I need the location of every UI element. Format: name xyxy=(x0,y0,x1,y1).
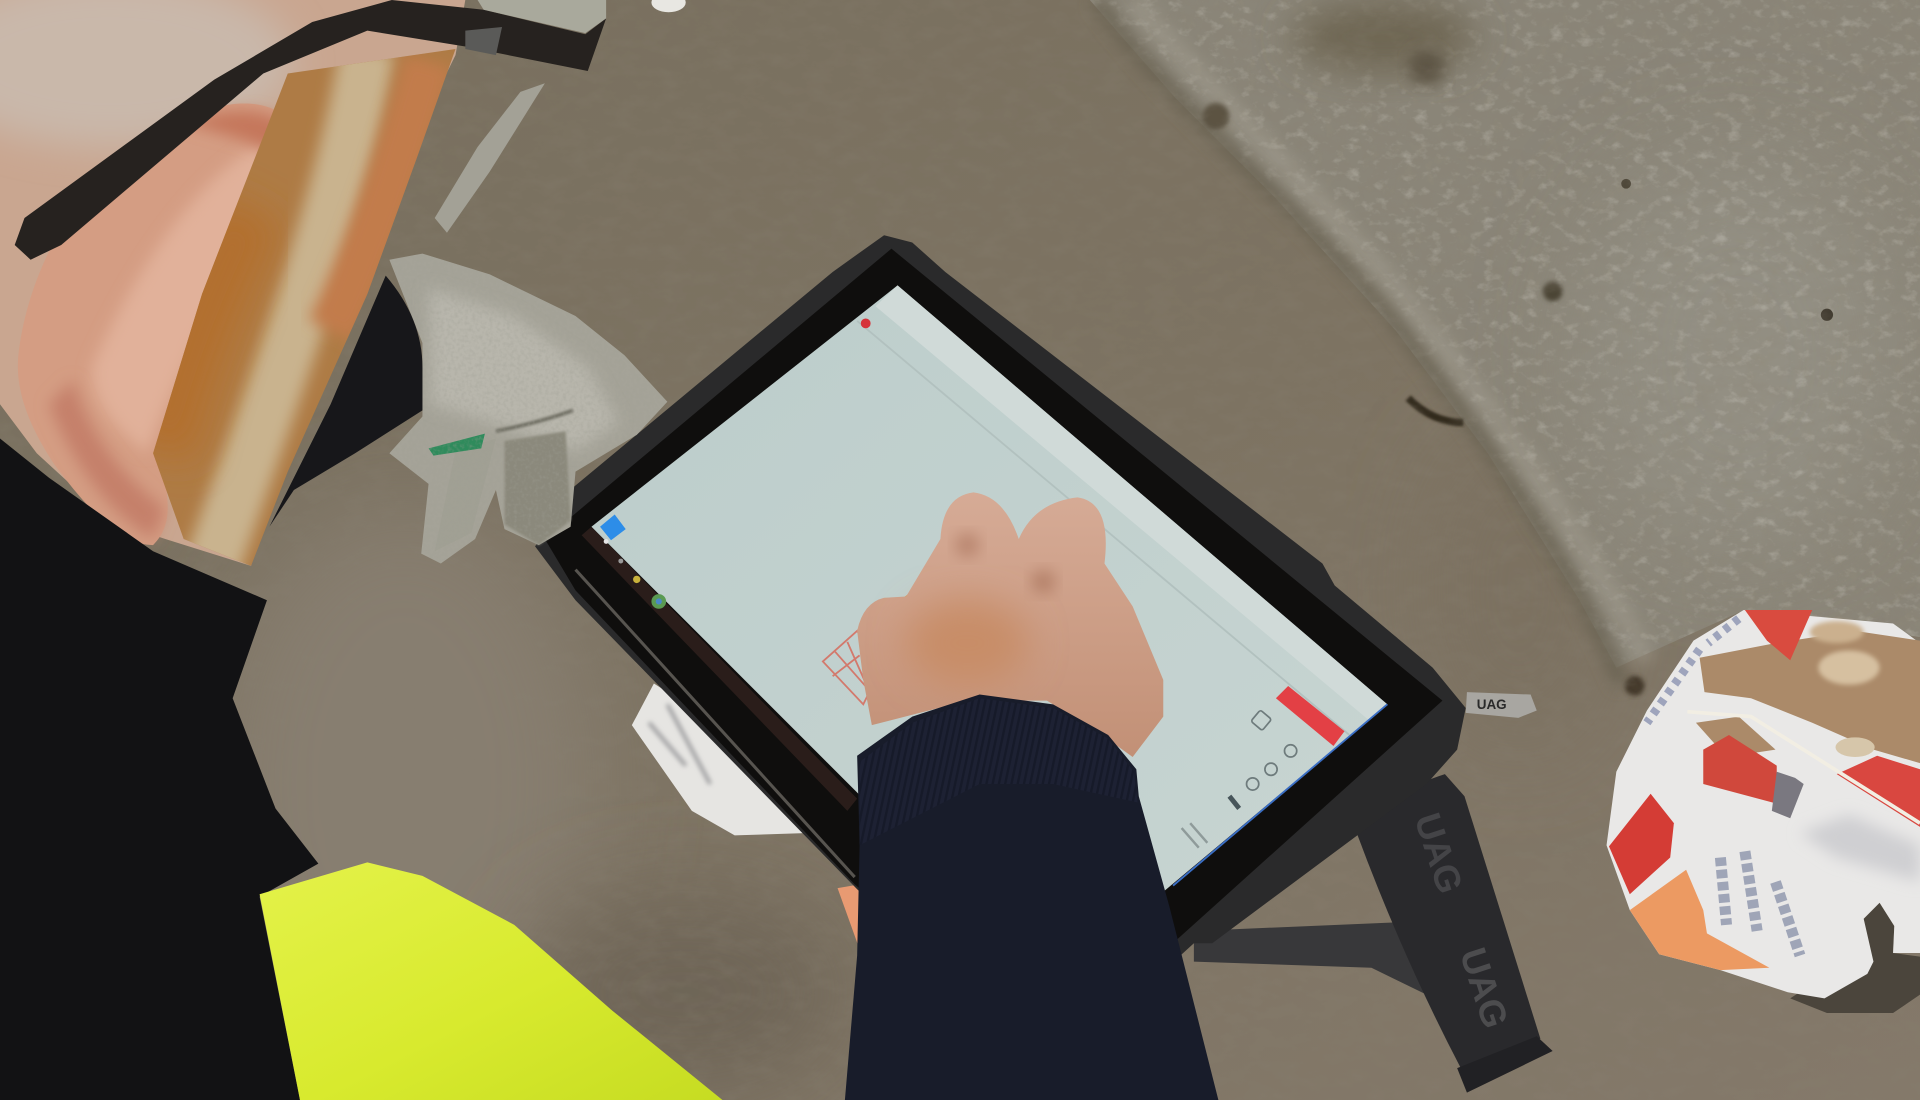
tablet screen xyxy=(582,285,1387,986)
tablet xyxy=(535,235,1466,1072)
left hand in grey glove xyxy=(380,245,673,570)
head: glasses lens reflection xyxy=(435,83,545,233)
worker head xyxy=(0,0,606,588)
head: beard xyxy=(153,49,456,566)
small white fleck at top edge xyxy=(651,0,686,12)
sleeve: ribbed cuff xyxy=(860,698,1138,845)
head: ear xyxy=(18,103,303,545)
bag: white paper body xyxy=(1607,610,1920,998)
right hand pointing at screen xyxy=(857,492,1163,757)
bag: crease xyxy=(1687,712,1920,823)
screen: bottom toolbar icons xyxy=(1182,710,1297,848)
bag: red band right xyxy=(1837,756,1920,827)
screen: red action button xyxy=(1276,686,1344,746)
background: rough lighter concrete at right xyxy=(1090,0,1920,699)
bag: dark hole and debris xyxy=(1790,903,1920,1013)
worker jacket: dark collar and body xyxy=(0,439,318,1100)
tablet strap xyxy=(1194,692,1553,1093)
bag: printed text block xyxy=(1720,851,1800,955)
worker right sleeve xyxy=(845,695,1218,1100)
screen: red record dot xyxy=(861,318,871,328)
head: skin xyxy=(0,0,465,566)
screen: top app bar xyxy=(876,285,1387,720)
strap: woven logo lower: UAG xyxy=(1452,943,1516,1033)
high visibility vest xyxy=(260,862,722,1100)
tablet bezel xyxy=(545,249,1442,1051)
bag: red logo top xyxy=(1745,610,1812,660)
bag: orange panel xyxy=(1630,870,1769,970)
head: safety glasses arm xyxy=(15,0,606,260)
screen: blue app tile xyxy=(600,514,626,540)
bag: red logo centre xyxy=(1703,735,1777,804)
cement bag: crumpled behind tablet xyxy=(632,684,860,949)
tablet edge highlight xyxy=(576,570,855,877)
screen: red floor plan drawing xyxy=(823,582,927,704)
tablet rugged case xyxy=(535,235,1466,1072)
screen: blue edge fringe xyxy=(1173,704,1387,886)
strap: grey tag xyxy=(1466,692,1537,718)
tablet strap: UAG xyxy=(1477,697,1507,712)
strap: woven logo upper: UAG xyxy=(1407,808,1471,898)
worker sleeve: left arm xyxy=(269,276,422,527)
screen: taskbar icons xyxy=(604,539,666,609)
bag: red logo left xyxy=(1609,794,1674,894)
screen: taskbar xyxy=(582,527,857,811)
bag: sand xyxy=(1700,631,1920,763)
cement bag with sand at right xyxy=(1607,610,1920,1013)
